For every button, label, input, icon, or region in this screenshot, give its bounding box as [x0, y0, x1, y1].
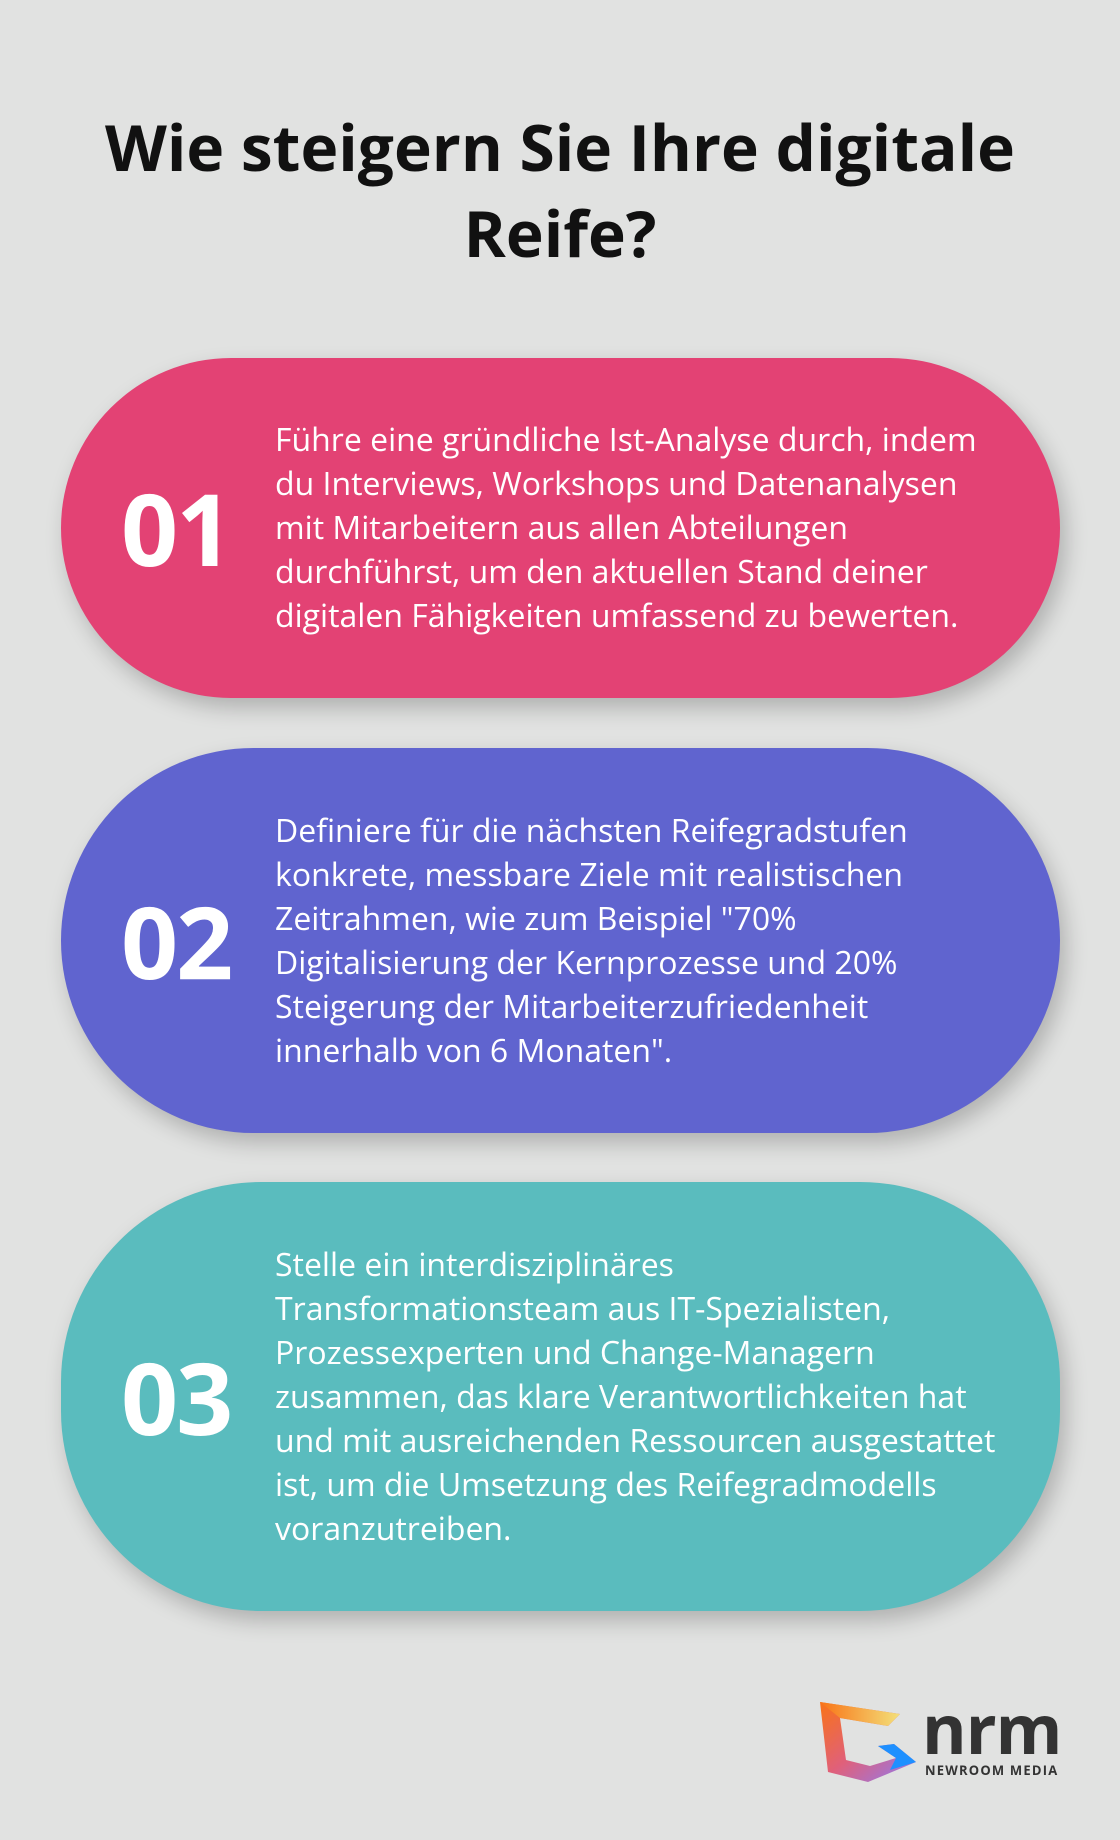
panel: step 01: [61, 358, 1060, 698]
logo: NEWROOM MEDIA: [925, 1761, 1058, 1779]
text 03: Prozessexperten und Change-Managern: [275, 1330, 875, 1374]
text 03: Stelle ein interdisziplinäres: [275, 1242, 674, 1286]
logo text: nrm: [922, 1681, 1061, 1774]
text 03: Transformationsteam aus IT-Spezialisten,: [275, 1286, 890, 1330]
text 01: [275, 418, 977, 637]
icon: logo mark: [820, 1702, 916, 1782]
text 01: durchführst, um den aktuellen Stand deiner: [275, 550, 928, 593]
text 03: und mit ausreichenden Ressourcen ausgestattet: [275, 1418, 995, 1462]
text 01: du Interviews, Workshops und Datenanalysen: [275, 462, 957, 505]
text 01: digitalen Fähigkeiten umfassend zu bewerten.: [275, 594, 958, 637]
text 03: [275, 1242, 995, 1550]
text 02: Digitalisierung der Kernprozesse und 20%: [275, 940, 897, 984]
text 03: voranzutreiben.: [275, 1506, 511, 1550]
text 01: Führe eine gründliche Ist-Analyse durch, indem: [275, 418, 977, 461]
title: [105, 103, 1015, 276]
number 01: 01: [121, 460, 231, 596]
title: Wie steigern Sie Ihre digitale: [105, 103, 1015, 190]
number 03: 03: [121, 1328, 231, 1464]
text 02: Definiere für die nächsten Reifegradstufen: [275, 808, 908, 852]
panel: step 03: [61, 1182, 1060, 1611]
text 02: konkrete, messbare Ziele mit realistischen: [275, 852, 903, 896]
title: Reife?: [464, 189, 656, 276]
logo: [820, 1681, 1061, 1782]
text 02: innerhalb von 6 Monaten".: [275, 1028, 672, 1072]
panel: step 02: [61, 748, 1060, 1133]
text 03: zusammen, das klare Verantwortlichkeiten hat: [275, 1374, 967, 1418]
text 02: Steigerung der Mitarbeiterzufriedenheit: [275, 984, 868, 1028]
number 02: 02: [121, 872, 231, 1008]
text 02: Zeitrahmen, wie zum Beispiel "70%: [275, 896, 797, 940]
text 02: [275, 808, 908, 1072]
text 01: mit Mitarbeitern aus allen Abteilungen: [275, 506, 848, 549]
text 03: ist, um die Umsetzung des Reifegradmodells: [275, 1462, 937, 1506]
